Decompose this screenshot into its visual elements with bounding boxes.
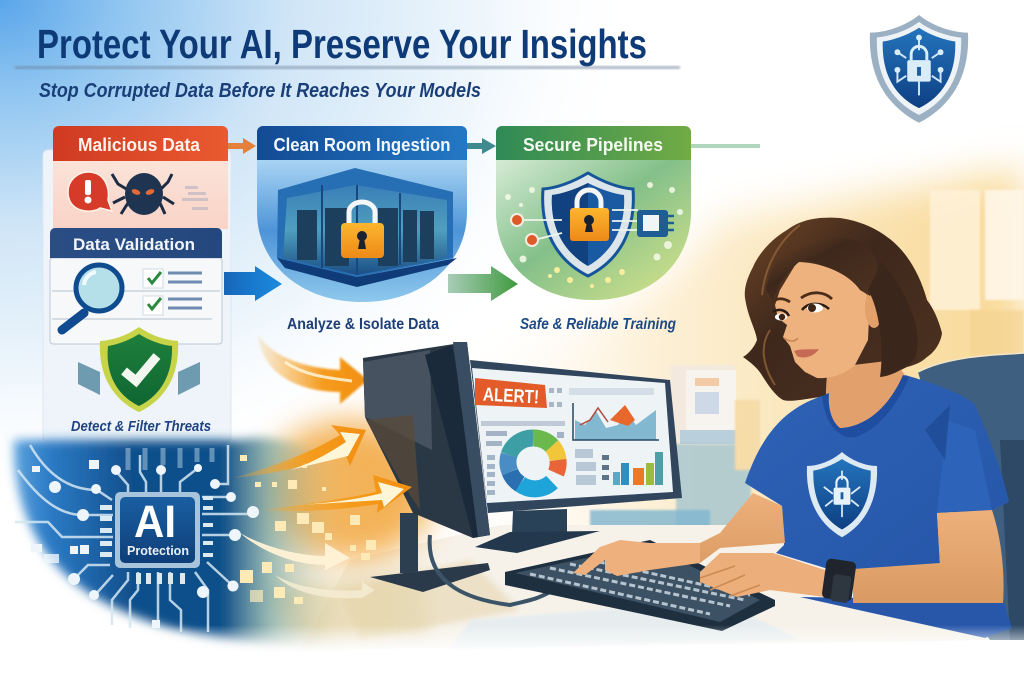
panel: data validation — [50, 228, 222, 344]
icon: front monitor — [470, 360, 682, 553]
alert banner: ALERT! — [482, 385, 539, 408]
logo: shirt shield — [807, 452, 877, 537]
eyes and mouth — [771, 293, 832, 358]
checklist — [143, 269, 202, 315]
t-shirt — [745, 375, 1009, 570]
icon: cables — [430, 535, 550, 605]
donut chart — [508, 438, 558, 489]
circuit traces — [15, 445, 252, 632]
smartwatch — [821, 558, 857, 603]
arm: left arm and hand — [573, 493, 785, 576]
arrows: glowing data streams — [233, 425, 412, 598]
arrow: orange connector — [228, 138, 256, 154]
white bottom strip — [0, 655, 1024, 683]
hand: left — [573, 540, 700, 576]
hair fringe — [766, 238, 877, 300]
chip: AI protection: Protection — [127, 543, 189, 558]
icon: alert bubble — [68, 172, 112, 211]
title divider — [15, 66, 680, 69]
figure: woman at desk — [573, 218, 1012, 638]
hands — [573, 540, 857, 603]
text: detect and filter threats: Detect & Filter Threats — [71, 418, 211, 435]
area chart — [573, 403, 659, 440]
icon: magnifier — [62, 265, 122, 330]
lower shirt — [800, 597, 1012, 638]
icon: back monitor — [363, 342, 490, 592]
face — [775, 262, 870, 378]
arrow: green — [448, 266, 518, 301]
hair back — [743, 218, 942, 401]
panel: secure pipelines: Secure Pipelines — [523, 135, 663, 155]
panel: AI circuit board — [14, 438, 400, 648]
panel: clean room ingestion: Clean Room Ingestion — [274, 135, 450, 155]
arrow: teal connector — [467, 138, 496, 154]
subtitle: Stop Corrupted Data Before It Reaches Your Models — [39, 80, 481, 102]
icon: server room with lock — [277, 168, 457, 287]
arm: right arm — [853, 510, 1004, 603]
icon: shield with lock and chip — [505, 173, 683, 288]
panel: secure pipelines — [496, 126, 760, 300]
arrow: orange swoosh — [258, 335, 368, 404]
panel: malicious data — [53, 126, 228, 229]
hand: right — [700, 553, 825, 597]
bottom fade — [0, 625, 1024, 655]
arrow: blue — [224, 266, 282, 301]
title: Protect Your AI, Preserve Your Insights — [37, 21, 647, 67]
text: safe and reliable training: Safe & Reliable Training — [520, 316, 676, 333]
desk — [300, 525, 990, 650]
icon: chair — [918, 353, 1024, 640]
glow: orange backdrop — [260, 420, 435, 640]
icon: keyboard — [505, 540, 775, 631]
chip: AI protection — [100, 492, 213, 584]
icon: green shield — [78, 327, 200, 412]
text: analyze and isolate data: Analyze & Isolate Data — [287, 316, 439, 333]
panel: clean room ingestion — [257, 126, 467, 302]
glowing data squares — [240, 455, 376, 604]
panel: data validation: Data Validation — [73, 235, 195, 254]
chip: AI protection: AI — [134, 496, 176, 547]
neck — [826, 360, 906, 428]
alert banner — [475, 378, 547, 408]
icon: bug — [112, 173, 174, 215]
bar chart — [575, 449, 663, 485]
icon: shield logo — [870, 15, 968, 123]
panel: malicious data: Malicious Data — [78, 135, 201, 155]
panel: threats column — [25, 126, 231, 442]
ear — [865, 288, 883, 328]
